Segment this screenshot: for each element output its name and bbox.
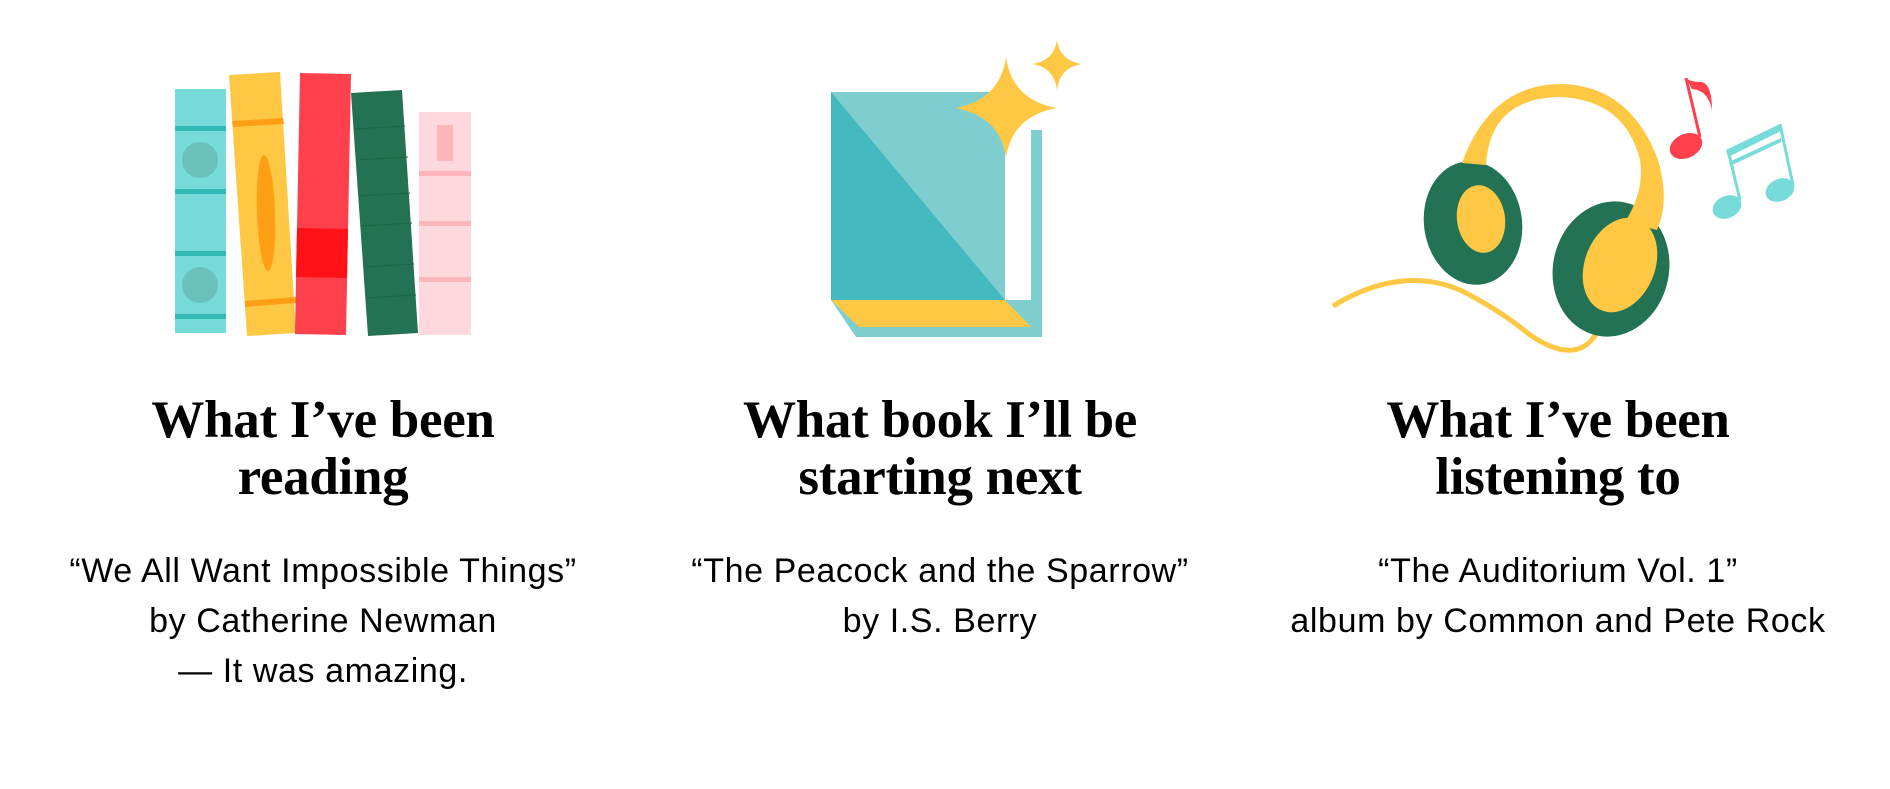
panel: next book	[691, 391, 1189, 640]
heading: reading: What I’ve been	[151, 391, 495, 449]
heading: listening: What I’ve been	[1386, 391, 1730, 449]
text: album	[1290, 552, 1826, 640]
heading: reading	[151, 391, 495, 506]
heading: next book	[743, 391, 1137, 506]
heading: next book: What book I’ll be	[743, 391, 1137, 449]
text: next book: by I.S. Berry	[843, 602, 1037, 640]
heading: listening	[1386, 391, 1730, 506]
heading: next book: starting next	[798, 448, 1082, 506]
heading: listening: listening to	[1435, 448, 1681, 506]
text: next book: “The Peacock and the Sparrow”	[691, 552, 1189, 590]
icon: headphones with music notes	[1333, 78, 1798, 350]
heading: reading: reading	[238, 448, 408, 506]
icon: stack of books	[175, 72, 471, 336]
panel: reading	[69, 391, 577, 690]
icon: book with sparkles	[831, 40, 1082, 337]
text: reading book: “We All Want Impossible Things”	[69, 552, 577, 590]
text: reading book: — It was amazing.	[178, 652, 468, 690]
text: next book	[691, 552, 1189, 640]
text: reading book: by Catherine Newman	[149, 602, 497, 640]
text: album: “The Auditorium Vol. 1”	[1378, 552, 1738, 590]
text: album: album by Common and Pete Rock	[1290, 602, 1826, 640]
text: reading book	[69, 552, 577, 690]
panel: listening	[1290, 391, 1826, 640]
